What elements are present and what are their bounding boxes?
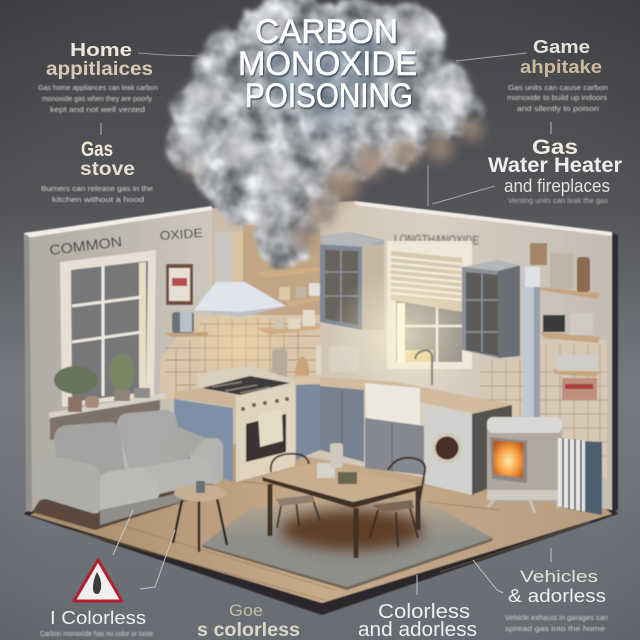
right shelves: [520, 243, 600, 400]
smoke: light highlights: [176, 12, 465, 227]
radiator: [558, 438, 602, 515]
description: spread gas into the home: [505, 626, 605, 633]
description: kitchen without a hood: [52, 197, 144, 204]
rug: [202, 498, 493, 590]
connector: [456, 53, 527, 61]
heading: Vehicles: [520, 567, 598, 586]
description: [38, 85, 158, 114]
heading: Colorless: [378, 601, 470, 623]
title line 1: CARBON: [255, 13, 398, 51]
back wall: [212, 201, 618, 510]
description: Carbon monoxide has no color or taste: [40, 631, 153, 638]
subheading: stove: [80, 159, 135, 180]
sofa: [38, 410, 223, 525]
smoke: blue shade behind title: [266, 33, 387, 129]
warning callout: colorless: [40, 510, 175, 638]
callout: home appliances: [38, 40, 201, 135]
heading: Gas: [81, 138, 113, 161]
connectors: [113, 510, 175, 589]
washing machine: [425, 405, 512, 495]
base cabinet left: [174, 388, 235, 482]
left wall shelf: [163, 312, 208, 337]
lower cabinets: [296, 384, 424, 475]
subheading: ahpitake: [520, 57, 602, 77]
title: [238, 13, 417, 115]
coffee table: [173, 481, 227, 552]
connectors: [473, 548, 551, 593]
label: goe colorless: [197, 601, 300, 640]
wood floor under-sofa shadow: [32, 470, 215, 530]
floor platform: [24, 420, 618, 615]
title line 2: MONOXIDE: [238, 45, 417, 83]
subheading 2: and fireplaces: [504, 176, 610, 196]
description: kept and not well vented: [50, 107, 145, 114]
wall text: oxide: LONGTHANOXIDE: [394, 232, 479, 247]
wood stove: [487, 417, 562, 513]
counter canisters: [272, 345, 359, 379]
callout: vehicles: [473, 548, 608, 633]
description: Venting units can leak the gas: [508, 198, 609, 205]
subheading: Water Heater: [488, 154, 622, 177]
dining chair left: [271, 454, 320, 528]
heading: Home: [70, 40, 132, 60]
backsplash tiles: [160, 315, 320, 400]
description: Gas home appliances can leak carbon: [38, 85, 158, 92]
plants: [54, 353, 150, 412]
kitchen shelves: [256, 267, 320, 335]
tick: [100, 123, 102, 135]
upper cabinet: [320, 232, 384, 330]
callout: gas stove: [41, 138, 153, 204]
callout: game appliance: [456, 37, 608, 134]
counter and sink: [320, 350, 515, 425]
flue pipe: [523, 267, 540, 420]
icon: warning triangle: [74, 560, 122, 601]
warm hood light: [185, 305, 295, 385]
window: left: [48, 250, 166, 440]
window with blinds: [387, 241, 472, 369]
smoke: brown trail: [185, 119, 483, 250]
subheading: appitlaices: [46, 59, 153, 80]
label: I Colorless: [50, 608, 146, 628]
wall text: common: COMMON: [48, 233, 123, 258]
description: [507, 85, 608, 113]
description: [505, 615, 608, 633]
rug shadow: [280, 510, 424, 550]
heading: Game: [533, 37, 590, 57]
connector: [138, 53, 201, 56]
connector: [416, 575, 418, 595]
label: colorless and adorless: [358, 575, 477, 640]
dining chair right: [370, 458, 425, 547]
description: Vehicle exhaust in garages can: [505, 615, 608, 622]
description: Burners can release gas in the: [41, 186, 153, 193]
window glow: [330, 267, 480, 403]
dining table: [262, 443, 423, 558]
description: monoxide gas when they are poorly: [42, 96, 152, 103]
connectors: [428, 165, 495, 206]
left wall: [24, 206, 212, 512]
subheading: & adorless: [508, 586, 606, 606]
right tiles: [480, 340, 607, 480]
wall text: oxide left: OXIDE: [159, 226, 203, 243]
description: monoxide to build up indoors: [507, 95, 608, 102]
gas stove: [196, 366, 295, 482]
description: Gas units can cause carbon: [508, 85, 608, 92]
callout: gas water heater: [428, 136, 622, 206]
tick: [550, 122, 552, 134]
smoke cloud: [165, 0, 483, 267]
room diorama: [24, 201, 618, 615]
heading: Goe: [229, 601, 263, 620]
description: and silently to poison: [517, 106, 599, 113]
title line 3: POISONING: [245, 77, 413, 115]
second upper cabinet: [462, 260, 520, 358]
picture frame: [166, 264, 193, 305]
heading: Gas: [532, 136, 578, 159]
smoke: mottled mass: [165, 0, 483, 267]
range hood: [194, 232, 286, 317]
description: [41, 186, 153, 204]
